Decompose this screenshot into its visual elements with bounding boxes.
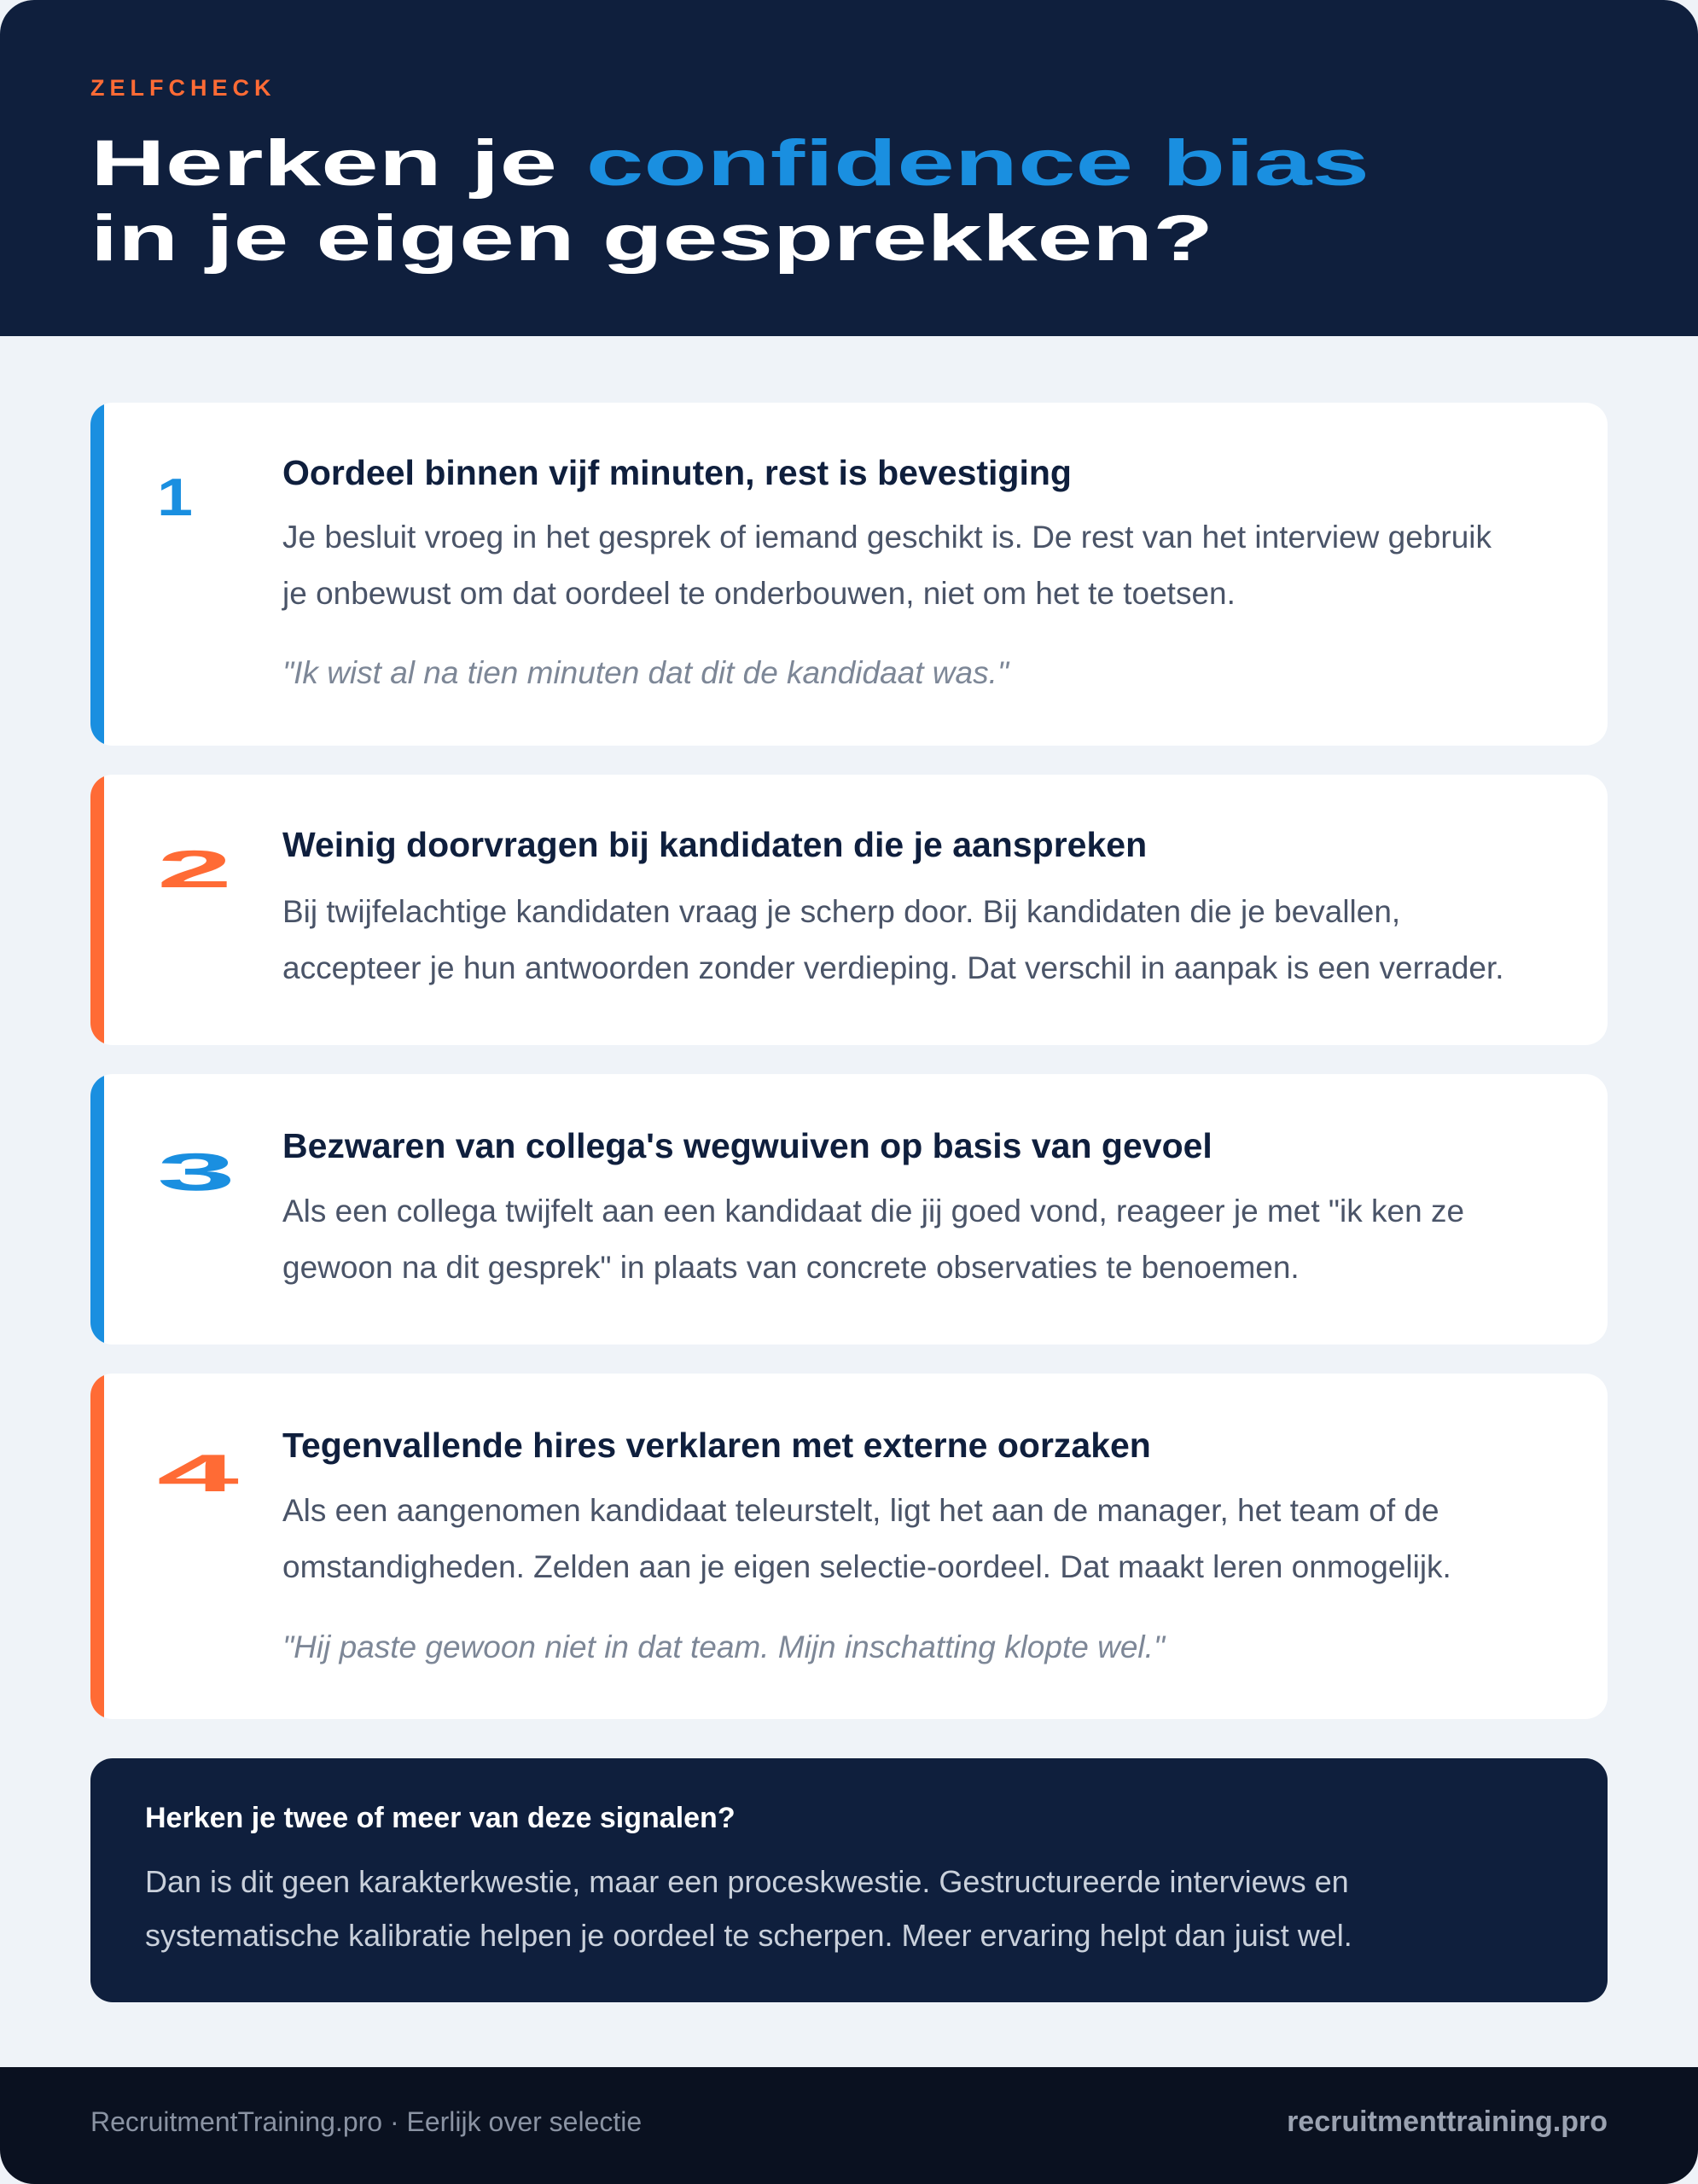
heading 3: Bezwaren van collega's wegwuiven op basis van gevoel (282, 1126, 1212, 1165)
quote 4: "Hij paste gewoon niet in dat team. Mijn inschatting klopte wel." (282, 1629, 1165, 1664)
card 4 (90, 1374, 1608, 1719)
heading 2: Weinig doorvragen bij kandidaten die je aanspreken (282, 825, 1147, 864)
body 1: je onbewust om dat oordeel te onderbouwen, niet om het te toetsen. (282, 576, 1236, 611)
header (0, 0, 1698, 336)
card 1 (90, 403, 1608, 746)
body 3: gewoon na dit gesprek" in plaats van concrete observaties te benoemen. (282, 1250, 1300, 1285)
footer (0, 2067, 1698, 2184)
callout body (145, 1864, 1352, 1953)
body 4 (282, 1493, 1451, 1584)
body 1: Je besluit vroeg in het gesprek of iemand geschikt is. De rest van het interview gebruik (282, 520, 1492, 555)
card 2 (90, 775, 1608, 1045)
footer left text: RecruitmentTraining.pro · Eerlijk over selectie (90, 2106, 642, 2137)
callout body: Dan is dit geen karakterkwestie, maar een proceskwestie. Gestructureerde interviews en (145, 1864, 1349, 1899)
callout box (90, 1758, 1608, 2002)
callout heading: Herken je twee of meer van deze signalen? (145, 1802, 736, 1834)
body 4: Als een aangenomen kandidaat teleurstelt, ligt het aan de manager, het team of de (282, 1493, 1439, 1528)
body 1 (282, 520, 1492, 611)
heading 4: Tegenvallende hires verklaren met externe oorzaken (282, 1426, 1151, 1465)
body 4: omstandigheden. Zelden aan je eigen selectie-oordeel. Dat maakt leren onmogelijk. (282, 1549, 1451, 1584)
callout body: systematische kalibratie helpen je oordeel te scherpen. Meer ervaring helpt dan juist wel. (145, 1918, 1352, 1953)
title: Herken je confidence bias (90, 127, 1369, 200)
card 3 (90, 1074, 1608, 1345)
kicker: ZELFCHECK (90, 75, 276, 101)
body 3: Als een collega twijfelt aan een kandidaat die jij goed vond, reageer je met "ik ken ze (282, 1194, 1464, 1228)
heading 1: Oordeel binnen vijf minuten, rest is bevestiging (282, 453, 1072, 492)
title: in je eigen gesprekken? (90, 202, 1213, 275)
quote 1: "Ik wist al na tien minuten dat dit de kandidaat was." (282, 655, 1009, 690)
body 2: Bij twijfelachtige kandidaten vraag je scherp door. Bij kandidaten die je bevallen, (282, 894, 1400, 929)
body 2: accepteer je hun antwoorden zonder verdieping. Dat verschil in aanpak is een verrader. (282, 950, 1504, 985)
body 3 (282, 1194, 1464, 1285)
body 2 (282, 894, 1504, 985)
footer right text: recruitmenttraining.pro (1287, 2106, 1608, 2138)
title (90, 127, 1369, 275)
